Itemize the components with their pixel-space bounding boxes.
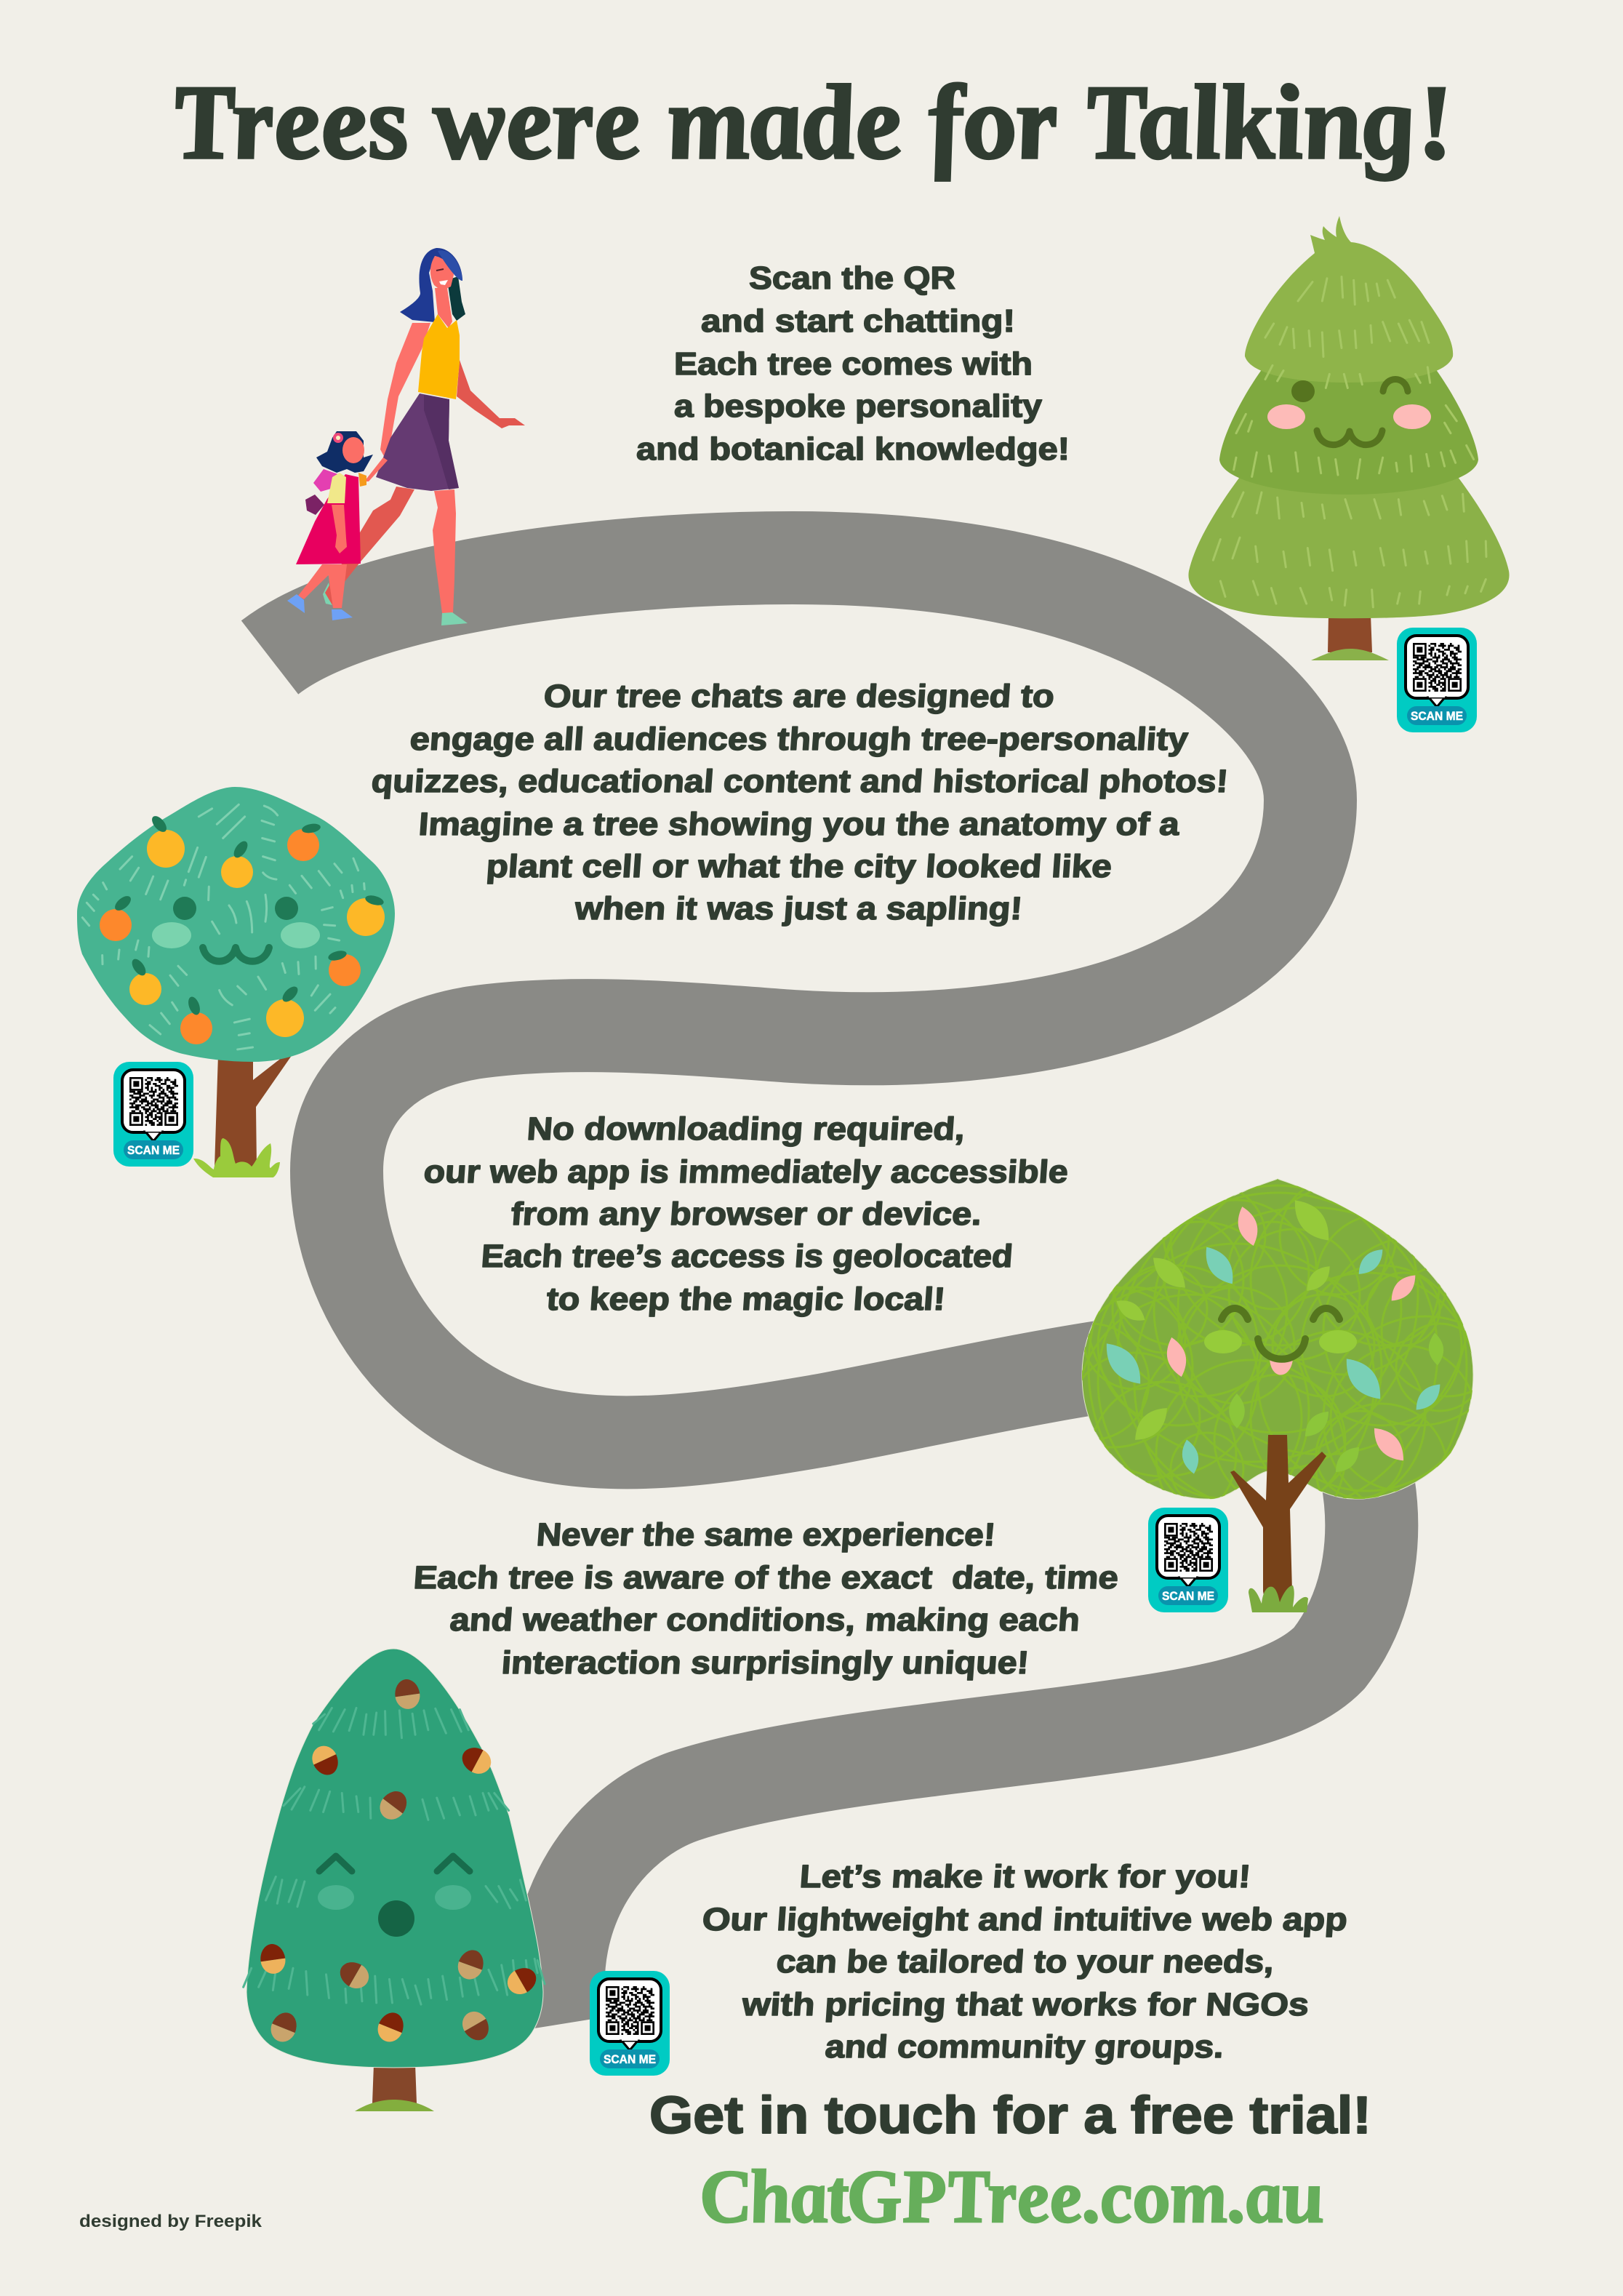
text block 2: engage all audiences through tree-personality	[409, 721, 1190, 757]
needle hatching	[1213, 276, 1486, 607]
foliage	[247, 1649, 543, 2068]
QR badge 3: SCAN ME	[1162, 1589, 1214, 1603]
foliage tiers	[1188, 216, 1510, 618]
trunk with raised branches	[1230, 1435, 1326, 1604]
website URL: ChatGPTree.com.au	[694, 2154, 1329, 2239]
tree 3: heart-shaped tree	[1082, 1178, 1473, 1612]
text block 4: and weather conditions, making each	[449, 1602, 1081, 1638]
text block 5: and community groups.	[824, 2029, 1225, 2065]
smiling face	[152, 897, 320, 961]
text block 5: with pricing that works for NGOs	[740, 1987, 1310, 2023]
QR badge 4: SCAN ME	[604, 2052, 656, 2066]
text block 1	[636, 260, 1070, 467]
text block 4: interaction surprisingly unique!	[500, 1645, 1030, 1681]
call to action: Get in touch for a free trial!	[649, 2087, 1371, 2145]
illustration: mother and daughter walking	[287, 248, 525, 625]
fruits	[100, 814, 385, 1044]
QR badge 4	[590, 1971, 670, 2076]
text block 1: Each tree comes with	[674, 346, 1033, 382]
text block 2: plant cell or what the city looked like	[485, 849, 1113, 884]
text block 3: from any browser or device.	[510, 1196, 983, 1232]
scribble texture	[1082, 1179, 1472, 1500]
title: Trees were made for Talking!	[163, 63, 1464, 181]
QR badge 1	[1397, 628, 1477, 732]
trunk and grass	[355, 2064, 434, 2111]
surprised face	[318, 1856, 471, 1937]
text block 5: Let’s make it work for you!	[798, 1859, 1252, 1895]
tree 2: orange tree	[77, 787, 395, 1177]
trunk and grass	[1311, 615, 1389, 660]
text block 2	[370, 679, 1230, 927]
credit: designed by Freepik	[79, 2212, 263, 2231]
text block 5: Our lightweight and intuitive web app	[701, 1902, 1349, 1937]
text block 3: to keep the magic local!	[545, 1281, 947, 1317]
text block 3: Each tree’s access is geolocated	[480, 1239, 1014, 1274]
QR badge 2	[113, 1062, 193, 1167]
trunk and branch	[215, 1055, 292, 1167]
text block 2: when it was just a sapling!	[573, 891, 1024, 927]
text block 1: and start chatting!	[701, 303, 1015, 339]
text block 4: Each tree is aware of the exact date, time	[412, 1560, 1120, 1596]
text block 2: quizzes, educational content and historical photos!	[370, 764, 1230, 799]
acorns	[259, 1678, 541, 2046]
leaves	[1097, 1193, 1446, 1477]
canopy	[77, 787, 395, 1062]
winking face	[1267, 380, 1431, 445]
text block 2: Our tree chats are designed to	[542, 679, 1056, 714]
text block 1: and botanical knowledge!	[636, 431, 1070, 467]
text block 3: our web app is immediately accessible	[422, 1154, 1070, 1190]
text block 4: Never the same experience!	[535, 1517, 997, 1553]
text block 5	[701, 1859, 1349, 2065]
QR badge 2: SCAN ME	[127, 1143, 180, 1157]
text block 3	[422, 1111, 1070, 1317]
grass	[1249, 1585, 1308, 1612]
text block 5: can be tailored to your needs,	[775, 1944, 1275, 1980]
text block 3: No downloading required,	[526, 1111, 966, 1147]
text block 4	[412, 1517, 1120, 1681]
QR badge 3	[1148, 1508, 1228, 1612]
text block 1: a bespoke personality	[674, 388, 1043, 424]
tree 4: acorn fir	[244, 1649, 545, 2111]
text block 2: Imagine a tree showing you the anatomy of a	[417, 807, 1181, 842]
QR badge 1: SCAN ME	[1411, 709, 1463, 723]
canopy	[1082, 1179, 1473, 1499]
needle hatching	[244, 1708, 545, 2004]
text block 1: Scan the QR	[749, 260, 955, 296]
happy face with tongue	[1204, 1308, 1357, 1375]
winding road	[270, 558, 1371, 2024]
tree 1: winking fir	[1188, 216, 1510, 660]
canopy hatching	[82, 804, 364, 1049]
grass	[193, 1138, 280, 1177]
